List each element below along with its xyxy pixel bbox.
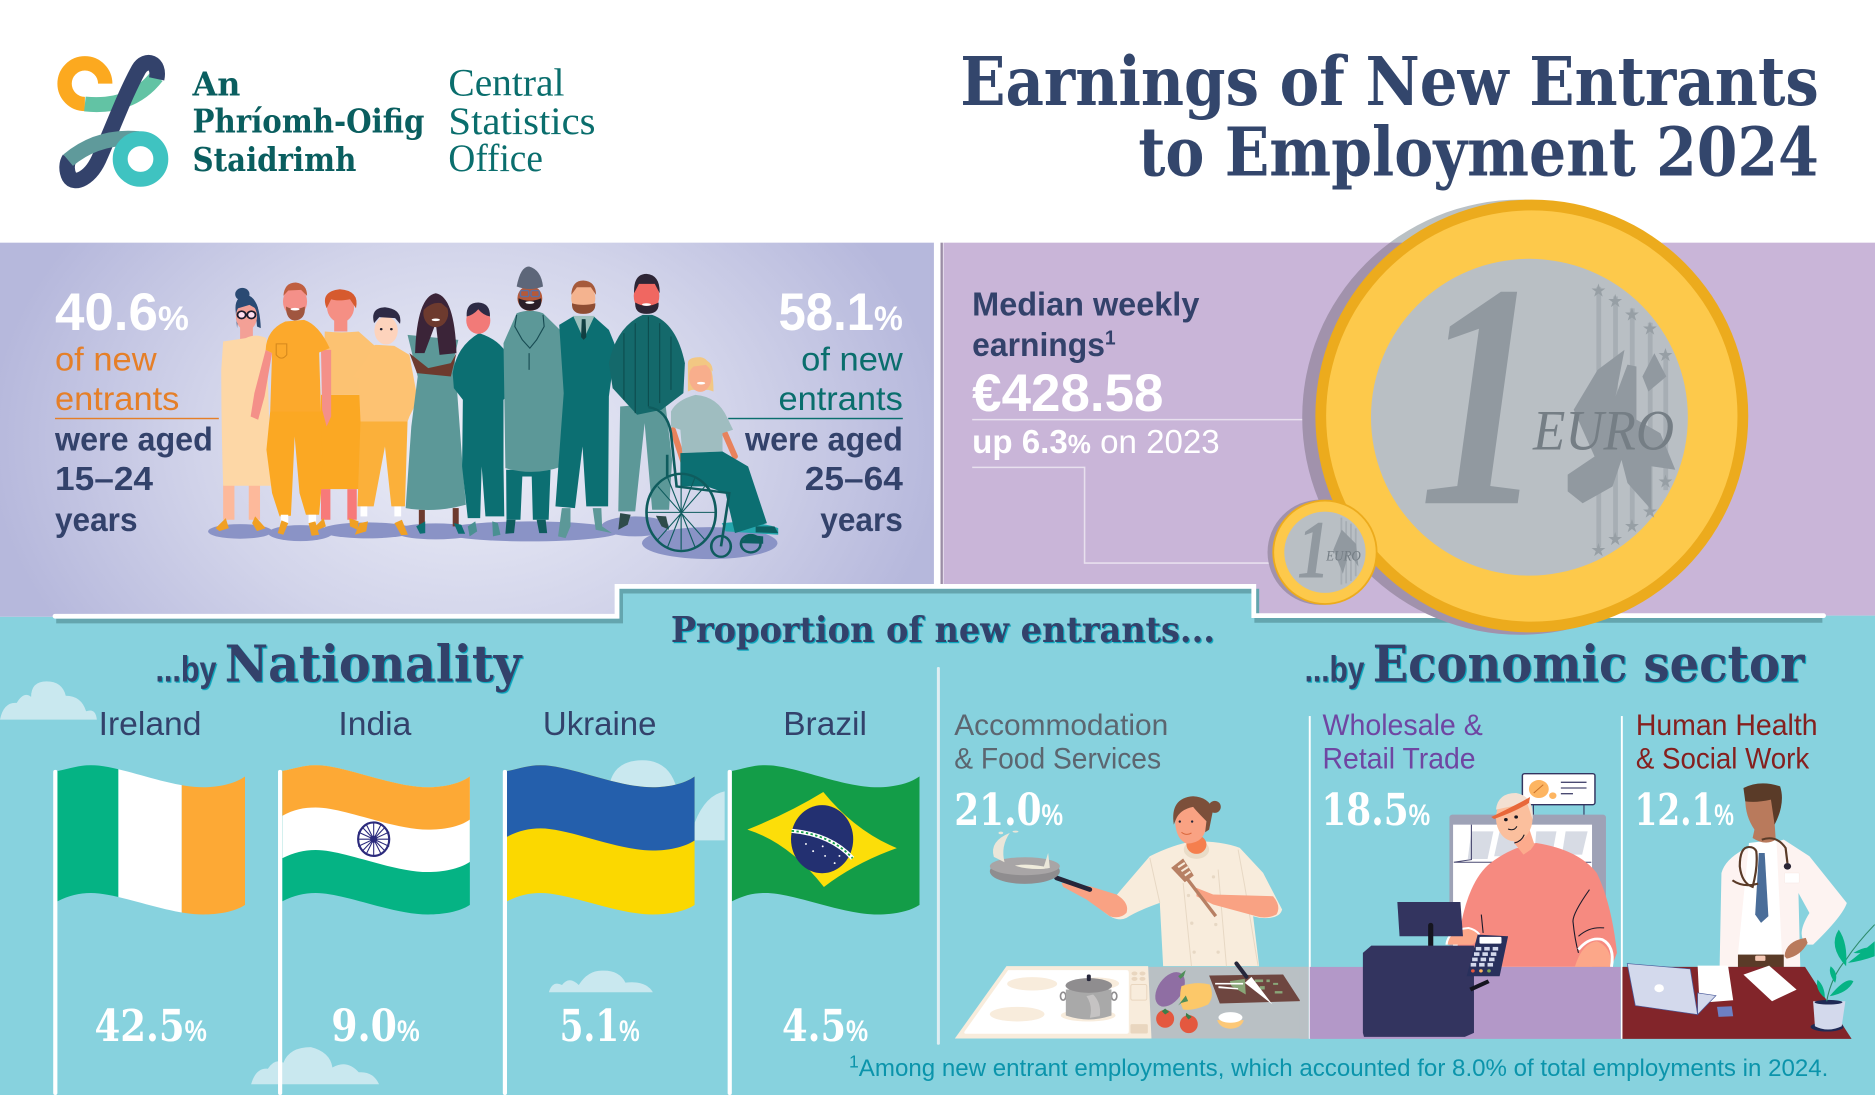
flag: Ukraine [503, 753, 695, 1095]
label: wholesale: Retail Trade [1323, 743, 1476, 776]
age 15-24 statistic: 15–24 [55, 461, 153, 498]
value: India 9.0%: 9.0% [331, 1000, 420, 1052]
illustration: chef at stove [955, 796, 1309, 1038]
illustration: cashier at till [1300, 774, 1621, 1039]
age 15-24 statistic: of new [55, 342, 158, 379]
icon: large one euro coin: ★ [1657, 345, 1673, 365]
label: Ireland: Ireland [99, 706, 201, 743]
person: woman in teal dress [406, 293, 466, 534]
logo text: Irish: An [192, 66, 240, 104]
label: India: India [338, 706, 412, 743]
panel: median weekly earnings [940, 243, 1875, 616]
panel: wholesale and retail trade [1300, 709, 1621, 1039]
illustration: doctor at desk [1622, 783, 1875, 1039]
logo text: English: Statistics [448, 99, 596, 143]
logo text: Irish [192, 66, 425, 179]
age 25-64 statistic: 58.1% [778, 283, 903, 342]
panel: accommodation and food services [954, 709, 1309, 1038]
age 25-64 statistic: of new [801, 342, 904, 379]
divider: health column [1621, 716, 1623, 1039]
label: human health: & Social Work [1636, 743, 1810, 776]
logo text: Irish: Staidrimh [193, 141, 356, 179]
icon: large one euro coin: ★ [1624, 304, 1640, 324]
value: 12.1%: 12.1% [1635, 784, 1734, 836]
person: man in suit [555, 281, 616, 538]
teal lower background [0, 587, 1875, 1095]
value: Ireland 42.5%: 42.5% [94, 1000, 207, 1052]
age 25-64 statistic: years [820, 502, 903, 539]
label: human health [1636, 709, 1818, 776]
age 25-64 statistic [728, 283, 904, 539]
icon: large one euro coin: ★ [1607, 291, 1623, 311]
label: accommodation: Accommodation [954, 709, 1168, 742]
icon: small one euro coin: 1 [1297, 503, 1330, 595]
clouds [0, 681, 725, 1084]
person: woman with red hair [315, 289, 376, 530]
flag: India [278, 753, 470, 1095]
main column divider [937, 667, 940, 1045]
icon: logo mark [65, 63, 161, 180]
label: wholesale: Wholesale & [1323, 709, 1483, 742]
label: human health: Human Health [1636, 709, 1818, 742]
logo text: English: Central [448, 61, 564, 105]
icon: large one euro coin [1302, 200, 1748, 635]
person: man in dark sweater [609, 274, 685, 530]
icon: small one euro coin: EURO [1325, 549, 1361, 565]
heading: by nationality: ...by [155, 649, 216, 689]
label: wholesale [1323, 709, 1483, 776]
person: woman in wheelchair [647, 357, 778, 557]
strip dividing the panels [55, 586, 1824, 621]
age 15-24 statistic: were aged [54, 422, 213, 459]
earnings text block: Median weekly [972, 287, 1200, 324]
earnings text block: up 6.3% on 2023 [972, 424, 1220, 461]
age 15-24 statistic [54, 283, 219, 539]
age 15-24 statistic: 40.6% [55, 283, 189, 342]
person: woman in pale dress [216, 288, 271, 531]
person: man in orange [251, 283, 331, 536]
flag: Brazil [728, 753, 920, 1095]
person: man in hat and long coat [504, 267, 566, 534]
icon: large one euro coin: ★ [1624, 516, 1640, 536]
person: woman in dark teal [453, 303, 511, 536]
age 25-64 statistic: entrants [778, 381, 903, 418]
age 15-24 statistic: years [55, 502, 138, 539]
label: accommodation [954, 709, 1168, 776]
label: Brazil: Brazil [783, 706, 867, 743]
value: 21.0%: 21.0% [954, 784, 1063, 836]
icon: large one euro coin: ★ [1657, 472, 1673, 492]
divider: wholesale column [1309, 716, 1311, 1039]
label: Ukraine: Ukraine [543, 706, 656, 743]
icon: large one euro coin: ★ [1590, 280, 1606, 300]
flag: Ireland [53, 753, 245, 1095]
earnings text block: earnings [972, 327, 1112, 364]
panel: human health and social work [1622, 709, 1875, 1039]
age 25-64 statistic: 25–64 [805, 461, 903, 498]
icon: large one euro coin: ★ [1590, 540, 1606, 560]
earnings text block: €428.58 [972, 364, 1164, 423]
age 15-24 statistic: entrants [55, 381, 179, 418]
icon: large one euro coin: 1 [1419, 218, 1545, 573]
title [960, 42, 1819, 192]
logo text: English: Office [448, 136, 543, 180]
icon: small one euro coin [1268, 500, 1378, 605]
logo text: Irish: Phríomh-Oifig [193, 103, 425, 141]
value: Brazil 4.5%: 4.5% [782, 1000, 868, 1052]
label: accommodation: & Food Services [954, 743, 1161, 776]
person: boy in yellow sweater [352, 307, 418, 535]
footnote: 1 [849, 1052, 859, 1072]
logo text: English [448, 61, 596, 180]
value: Ukraine 5.1%: 5.1% [560, 1000, 640, 1052]
heading: by economic sector: ...by [1305, 649, 1364, 689]
earnings text block: 1 [1105, 327, 1116, 349]
icon: large one euro coin: ★ [1642, 502, 1658, 522]
heading: by economic sector: Economic sector [1373, 634, 1805, 693]
heading: by nationality: Nationality [225, 634, 523, 693]
earnings text block [972, 287, 1220, 461]
icon: large one euro coin: ★ [1642, 319, 1658, 339]
footnote: Among new entrant employments, which accounted for 8.0% of total employments in 2024. [859, 1055, 1828, 1082]
heading: proportion of new entrants: Proportion of new entrants... [671, 609, 1215, 651]
icon: large one euro coin: EURO [1532, 399, 1674, 462]
icon: large one euro coin: ★ [1607, 529, 1623, 549]
age 25-64 statistic: were aged [744, 422, 903, 459]
value: 18.5%: 18.5% [1321, 784, 1430, 836]
panel: age groups [0, 243, 934, 617]
illustration: group of people [208, 267, 778, 559]
